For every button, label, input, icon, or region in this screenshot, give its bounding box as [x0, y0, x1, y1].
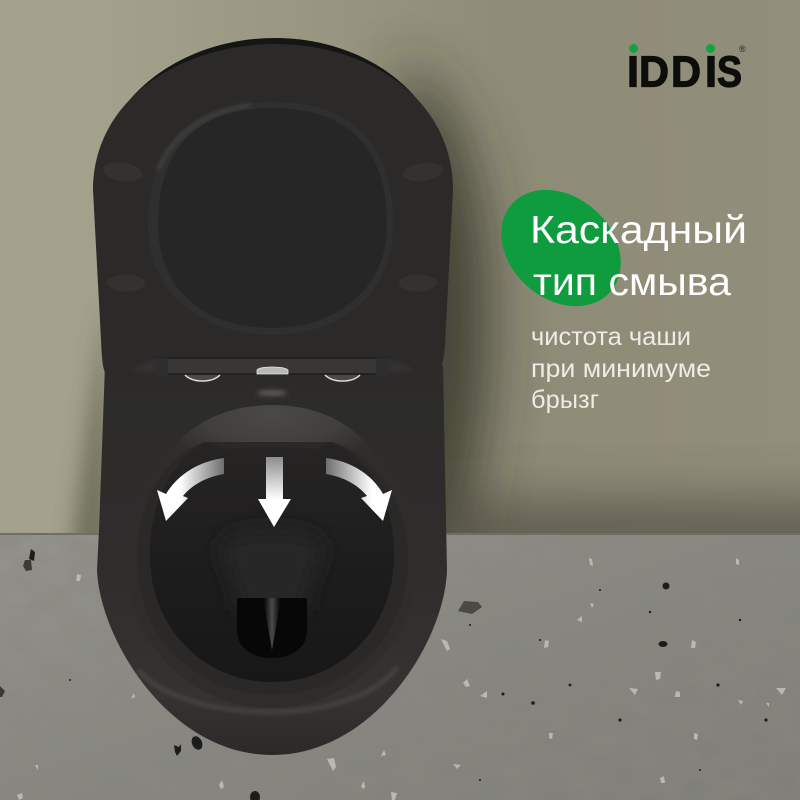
- logo: IDDIS: D: [639, 48, 669, 96]
- heading: [530, 209, 747, 304]
- heading: тип смыва: [533, 261, 731, 304]
- chrome hinge button: [257, 367, 288, 374]
- seat bumper top left: [102, 160, 144, 184]
- bowl side ring: [137, 442, 408, 695]
- lid centre rim: [148, 102, 393, 335]
- arrow: left flow: [157, 458, 224, 521]
- heading: Каскадный: [530, 209, 747, 252]
- chrome hinge fitting left: [185, 375, 220, 381]
- logo: IDDIS: S: [717, 48, 742, 96]
- drain reflection: [263, 598, 281, 650]
- logo: IDDIS: I: [627, 48, 639, 96]
- description text: чистота чаши: [531, 323, 691, 351]
- rim shoulder highlight: [138, 667, 398, 712]
- drain opening: [237, 598, 307, 658]
- seat bumper bottom left: [107, 274, 145, 292]
- seat bumper top right: [402, 160, 444, 184]
- rim highlight: [158, 105, 250, 170]
- wall background: [0, 0, 800, 565]
- dark floor speckles: [0, 549, 768, 800]
- logo: IDDIS: ®: [739, 44, 746, 54]
- description text: [531, 323, 711, 414]
- toilet seat lid: [93, 44, 453, 376]
- logo: IDDIS: I: [705, 48, 717, 96]
- hinge bar: [130, 357, 415, 375]
- chrome hinge fitting right: [325, 375, 360, 381]
- hinge reflection: [257, 390, 287, 396]
- bowl funnel: [222, 530, 322, 610]
- bowl shelf: [127, 405, 417, 708]
- description text: брызг: [531, 386, 599, 414]
- toilet: [93, 38, 453, 755]
- lid centre panel: [158, 108, 387, 328]
- logo: IDDIS: [627, 44, 746, 96]
- toilet body: [97, 365, 447, 755]
- green blob accent: [478, 166, 644, 330]
- shelf top highlight: [165, 405, 378, 460]
- logo: IDDIS: D: [671, 48, 701, 96]
- description text: при минимуме: [531, 355, 711, 383]
- floor: terrazzo concrete: [0, 533, 800, 800]
- arrow: right flow: [326, 458, 392, 521]
- back edge of seat: [96, 38, 450, 190]
- seat bumper bottom right: [399, 274, 437, 292]
- light floor speckles: [17, 558, 786, 800]
- arrow: centre flow: [258, 457, 291, 527]
- bowl interior: [150, 442, 394, 682]
